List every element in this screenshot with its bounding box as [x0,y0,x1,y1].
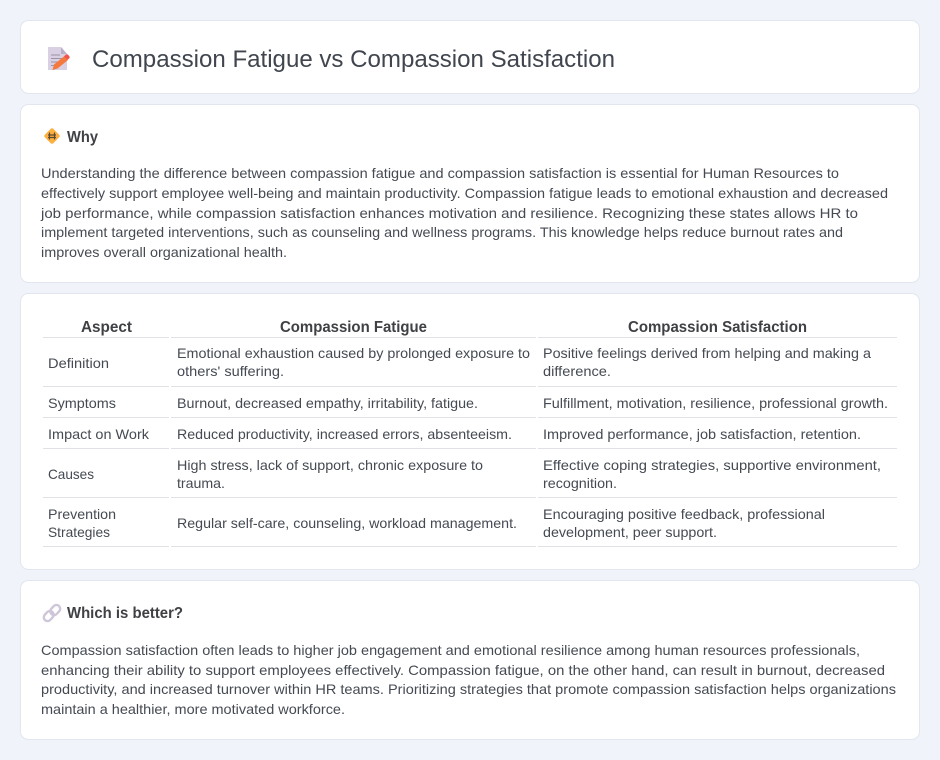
text block: which body: Compassion satisfaction often leads to higher job engagement and emotional resilience among human resources professionals, [41,642,860,658]
table header: Aspect [81,319,133,336]
table row: prevention strategies: Regular self-care, counseling, workload management. [177,515,517,531]
text block: why body: effectively support employee well-being and maintain productivity. Compassion fatigue leads to emotional exhaustion and decreased [41,185,888,201]
table row: impact on work: Reduced productivity, increased errors, absenteeism. [177,426,512,442]
table row: prevention strategies: Encouraging positive feedback, professional [543,506,825,522]
icon: chain link [42,603,62,623]
table row: impact on work: Improved performance, job satisfaction, retention. [543,426,861,442]
table row: causes: trauma. [177,475,225,491]
panel: which is better [20,580,920,740]
table row: definition: difference. [543,363,611,379]
table row: prevention strategies: Prevention [48,506,116,522]
table header [43,319,897,338]
table row: symptoms: Fulfillment, motivation, resilience, professional growth. [543,395,888,411]
text block: which body [41,642,896,717]
panel: title card [20,20,920,94]
table row: symptoms: Symptoms [48,395,116,411]
table row: definition [43,345,897,387]
table row: definition: Emotional exhaustion caused by prolonged exposure to [177,345,530,361]
title: Compassion Fatigue vs Compassion Satisfaction [92,46,615,73]
text block: why body: Understanding the difference between compassion fatigue and compassion satisfaction is essential for Human Resources to [41,165,839,181]
text block: why body: improves overall organizational health. [41,244,287,260]
table row: causes: High stress, lack of support, chronic exposure to [177,457,483,473]
text block: which body: enhancing their ability to support employees effectively. Compassion fatigue, on the other hand, can result in burnout, decreased [41,662,885,678]
table row: impact on work: Impact on Work [48,426,150,442]
table row: prevention strategies: Strategies [48,524,110,540]
table row: definition: Positive feelings derived from helping and making a [543,345,871,361]
panel: comparison table [20,294,920,570]
text block: why body: job performance, while compassion satisfaction enhances motivation and resilience. Recognizing these states allows HR to [40,205,858,221]
text block: which body: maintain a healthier, more motivated workforce. [41,701,345,717]
table header: Compassion Satisfaction [628,319,807,336]
table row: causes: Effective coping strategies, supportive environment, [543,457,881,473]
text block: which body: productivity, and increased turnover within HR teams. Prioritizing strategies that promote compassion satisfaction helps organizations [41,681,896,697]
table header: Compassion Fatigue [280,319,427,336]
table row: prevention strategies: development, peer support. [543,524,717,540]
table row: definition: others' suffering. [177,363,284,379]
table row: causes [43,457,897,498]
panel: why [20,104,920,282]
table row: impact on work [43,426,897,449]
table row: definition: Definition [48,355,109,371]
table row: symptoms [43,395,897,418]
text block: why body: implement targeted interventions, such as counseling and wellness programs. This knowledge helps reduce burnout rates and [41,224,843,240]
heading: which is better: Which is better? [67,605,183,622]
table row: prevention strategies [43,506,897,547]
table row: symptoms: Burnout, decreased empathy, irritability, fatigue. [177,395,478,411]
table row: causes: recognition. [543,475,617,491]
icon: warning diamond [44,128,60,144]
text block: why body [40,165,888,260]
heading: why: Why [67,129,98,146]
icon: memo with pencil [48,47,70,70]
table row: causes: Causes [48,466,94,482]
